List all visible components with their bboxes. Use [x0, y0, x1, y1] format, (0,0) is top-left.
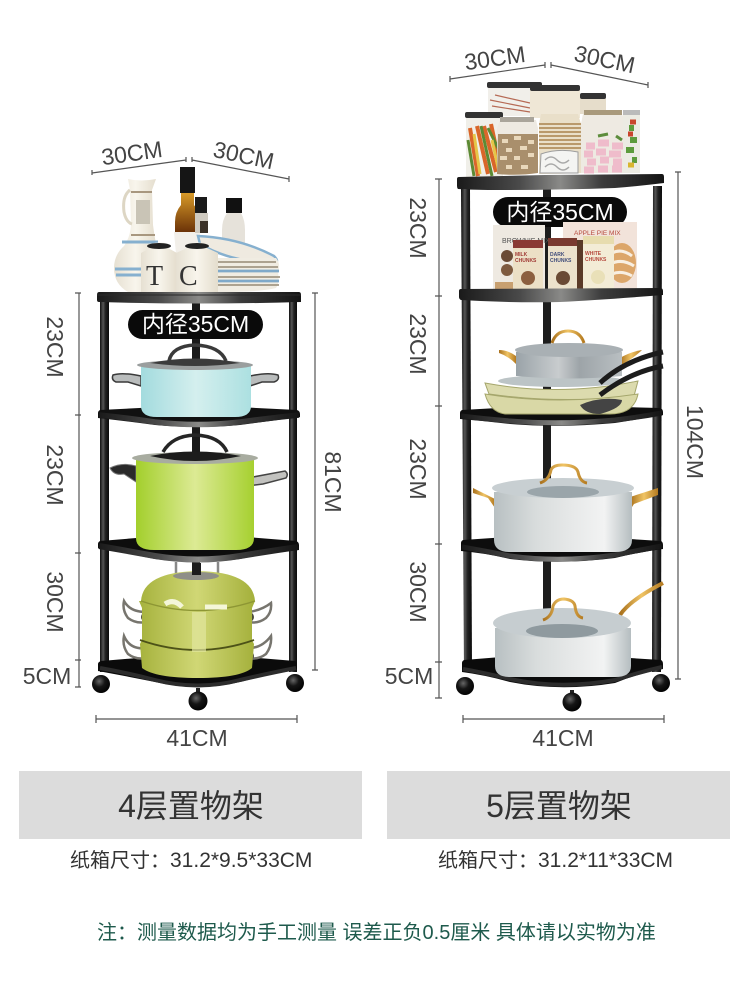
dimensions: left vertical heights: 5CM: [385, 663, 433, 689]
icon: marshmallow jar: [581, 110, 626, 173]
rack shelf: tier 4: [98, 653, 297, 687]
icon: striped jug: [114, 179, 158, 292]
dimensions: top 30CM right: [192, 136, 289, 182]
heading: 5-tier band: 5层置物架: [486, 788, 632, 824]
icon: saucepan with gold handles: [499, 331, 642, 378]
dimensions: overall height 104CM: [675, 172, 708, 679]
icon: jar T: [141, 242, 177, 293]
icon: jar C: C: [179, 261, 198, 292]
dimensions: left vertical heights: 30CM: [42, 571, 68, 633]
icon: apple pie mix box: APPLE PIE MIX: [574, 230, 621, 237]
dimensions: overall height 104CM: 104CM: [682, 405, 708, 479]
dimensions: left vertical heights: [385, 179, 442, 698]
dimensions: top 30CM left: [92, 136, 186, 175]
icon: milk chunks box: [513, 240, 543, 292]
pole: front left: [100, 302, 109, 672]
heading: 4-tier band: 4层置物架: [118, 788, 264, 824]
rack shelf: tier 4: [461, 534, 663, 562]
icon: stacked olive pans: [485, 375, 638, 414]
rack shelf: tier 3: [98, 533, 299, 562]
cereal boxes: [493, 222, 637, 292]
icon: white chunks box: WHITE: [585, 251, 602, 257]
dimensions: top 30CM right: 30CM: [572, 40, 637, 78]
icon: silver pot: [473, 465, 658, 552]
rack shelf: tier 5: [462, 653, 663, 687]
icon: dark chunks box: [548, 238, 577, 292]
icon: jar C: [176, 242, 218, 293]
callout: inner diameter: [493, 197, 627, 227]
icon: black pan handles: [580, 352, 663, 414]
dimensions: left vertical heights: 23CM: [405, 438, 431, 500]
rack back pole: [543, 186, 551, 656]
dimensions: left vertical heights: 23CM: [405, 313, 431, 375]
dimensions: left vertical heights: 23CM: [42, 444, 68, 506]
panel: 4-tier rack: [23, 136, 346, 751]
icon: white sauce bottle: [222, 198, 245, 245]
dimensions: overall height 81CM: [312, 293, 346, 670]
dimensions: left vertical heights: 23CM: [42, 316, 68, 378]
icon: apple pie mix box: [563, 222, 637, 290]
icon: white chunks box: CHUNKS: [585, 257, 607, 263]
rack shelf: tier 2: [459, 288, 663, 302]
icon: back storage boxes: [487, 82, 606, 118]
callout: inner diameter: 内径35CM: [506, 199, 614, 225]
icon: silver pan with long handle: [493, 583, 663, 677]
top-shelf items: jug, bottles, jars, plates: [114, 167, 280, 293]
rack shelf: tier 1: [97, 292, 301, 304]
icon: brownie mix box: [493, 225, 550, 292]
pole: front left: [461, 189, 472, 672]
icon: jar T: T: [146, 261, 163, 292]
dimensions: width 41CM: 41CM: [532, 725, 594, 751]
icon: oil bottle: [174, 167, 200, 254]
dimensions: left vertical heights: 30CM: [405, 561, 431, 623]
dimensions: top 30CM left: [450, 41, 545, 82]
icon: olive steamer pots: [124, 562, 271, 678]
icon: lime stock pot: [110, 435, 287, 550]
icon: pasta box: [465, 112, 503, 178]
icon: milk chunks box: MILK: [515, 252, 528, 258]
dimensions: overall height 81CM: 81CM: [320, 451, 346, 513]
callout: inner diameter: 内径35CM: [142, 311, 249, 337]
heading: 4-tier band: [19, 771, 362, 839]
pole: front right: [289, 302, 297, 672]
pole: front right: [652, 186, 662, 672]
text: 5-tier carton size: 纸箱尺寸：31.2*11*33CM: [438, 849, 673, 872]
icon: candy jar: [623, 110, 640, 173]
icon: white chunks box: [583, 236, 614, 290]
icon: dark divider box: [577, 240, 583, 292]
text: 4-tier carton size: 纸箱尺寸：31.2*9.5*33CM: [70, 849, 312, 872]
dimensions: top 30CM right: 30CM: [211, 136, 276, 174]
rack shelf: tier 3: [460, 405, 663, 426]
top-shelf items: storage jars: [465, 82, 640, 178]
icon: nuts jar: [497, 117, 538, 175]
dimensions: width 41CM: [463, 715, 664, 751]
rack shelf: tier 1: [457, 174, 664, 190]
icon: striped jar: [539, 114, 581, 174]
dimensions: top 30CM left: 30CM: [463, 41, 527, 75]
rack back pole: [192, 300, 200, 680]
icon: pepper bottle: [195, 197, 208, 233]
dimensions: top 30CM left: 30CM: [100, 136, 164, 170]
dimensions: top 30CM right: [551, 40, 648, 88]
heading: 5-tier band: [387, 771, 730, 839]
icon: dark chunks box: CHUNKS: [550, 258, 572, 264]
dimensions: left vertical heights: 5CM: [23, 663, 71, 689]
icon: brownie mix box: BROWNIE MIX: [502, 238, 550, 245]
icon: teal pot: [112, 345, 278, 417]
panel: 5-tier rack: [385, 40, 708, 751]
dimensions: width 41CM: 41CM: [166, 725, 228, 751]
rack shelf: tier 2: [98, 405, 300, 427]
icon: dark chunks box: DARK: [550, 252, 565, 258]
icon: striped plates: [198, 236, 280, 292]
icon: casters: [92, 674, 304, 710]
icon: casters: [456, 674, 670, 712]
icon: milk chunks box: CHUNKS: [515, 258, 537, 264]
dimensions: left vertical heights: [23, 293, 81, 689]
dimensions: width 41CM: [96, 715, 297, 751]
text: measurement note: 注：测量数据均为手工测量 误差正负0.5厘米 具体请以实物为准: [97, 921, 656, 944]
dimensions: left vertical heights: 23CM: [405, 197, 431, 259]
